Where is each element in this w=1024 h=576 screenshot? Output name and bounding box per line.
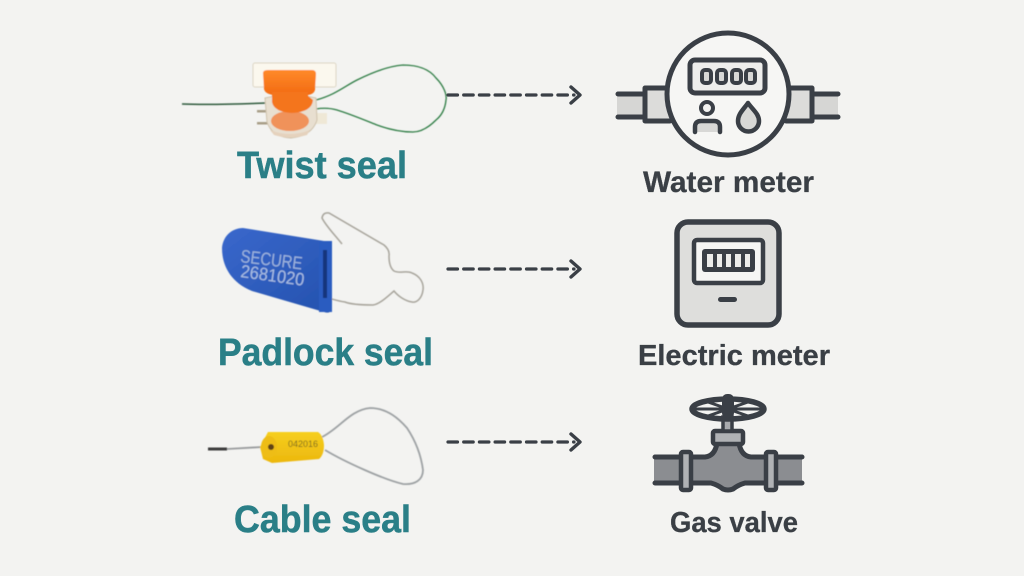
icon: gas valve bbox=[654, 394, 802, 490]
heading: Twist seal: Twist seal bbox=[237, 145, 407, 187]
label: Water meter: Water meter bbox=[643, 166, 814, 199]
arrow: cable seal to gas valve bbox=[448, 434, 580, 450]
heading: Cable seal: Cable seal bbox=[234, 499, 411, 541]
padlock seal photo bbox=[222, 213, 423, 313]
icon: electric meter bbox=[677, 222, 779, 325]
cable seal photo bbox=[208, 408, 423, 484]
label: Gas valve: Gas valve bbox=[670, 507, 798, 539]
twist seal photo bbox=[182, 63, 446, 138]
padlock seal photo: SECURE bbox=[240, 246, 303, 274]
padlock seal photo: 2681020 bbox=[239, 261, 306, 290]
label: Electric meter: Electric meter bbox=[638, 340, 830, 372]
arrow: twist seal to water meter bbox=[448, 87, 580, 103]
cable seal photo: 042016 bbox=[288, 439, 318, 450]
heading: Padlock seal: Padlock seal bbox=[218, 332, 433, 374]
icon: water meter bbox=[617, 33, 838, 155]
arrow: padlock seal to electric meter bbox=[448, 261, 580, 277]
